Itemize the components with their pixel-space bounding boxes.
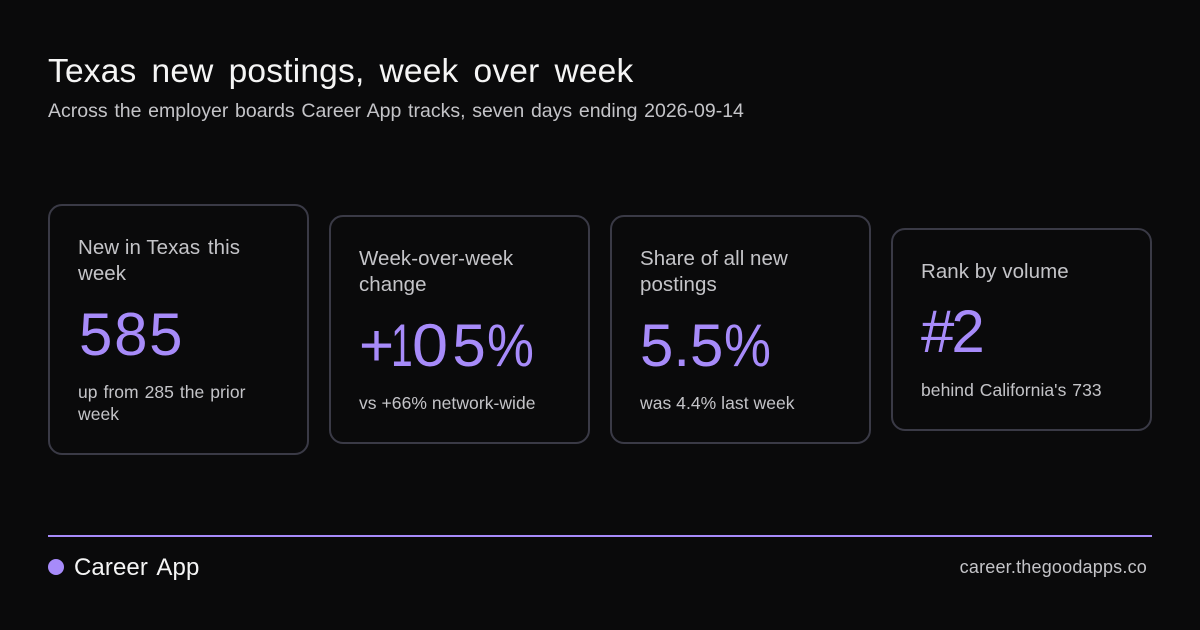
footer rule [48, 535, 1152, 537]
footer url: career.thegoodapps.co [960, 557, 1147, 577]
label: share: Share of all new [640, 247, 788, 270]
title: Texas new postings, week over week [48, 53, 633, 90]
value: 5.5%: % [724, 312, 771, 379]
subtitle: Across the employer boards Career App tracks, seven days ending 2026-09-14 [48, 100, 744, 122]
note: network-wide: vs +66% network-wide [359, 393, 536, 413]
label: change: change [359, 273, 427, 296]
value: 5.5% [640, 312, 771, 379]
value: +105%: + 5 [359, 312, 486, 379]
value: 585: 585 [79, 301, 184, 368]
panel: week-over-week change [329, 215, 590, 444]
label: new in Texas [78, 236, 240, 285]
panel: new in Texas [48, 204, 309, 455]
value: #2: #2 [921, 298, 982, 365]
note: prior week: up from 285 the prior [78, 382, 246, 402]
icon: brand dot [48, 559, 64, 575]
value: +105%: % [487, 312, 534, 379]
label: rank: Rank by volume [921, 260, 1069, 283]
brand name: Career App [74, 554, 199, 581]
note: prior week [78, 382, 246, 424]
note: prior week: week [78, 404, 119, 424]
note: last week: was 4.4% last week [640, 393, 795, 413]
value: +105%: 0 [412, 312, 448, 379]
label: new in Texas: New in Texas this [78, 236, 240, 259]
label: change [359, 247, 514, 296]
panel: rank by volume [891, 228, 1152, 431]
panel: share of postings [610, 215, 871, 444]
label: change: Week-over-week [359, 247, 513, 270]
label: share: postings [640, 273, 717, 296]
brand [48, 554, 199, 581]
note: behind California: behind California's 733 [921, 380, 1102, 400]
label: share [640, 247, 788, 296]
label: new in Texas: week [78, 262, 126, 285]
value: 5.5%: 5.5 [640, 312, 723, 379]
value: +105%: 1 [391, 312, 413, 379]
